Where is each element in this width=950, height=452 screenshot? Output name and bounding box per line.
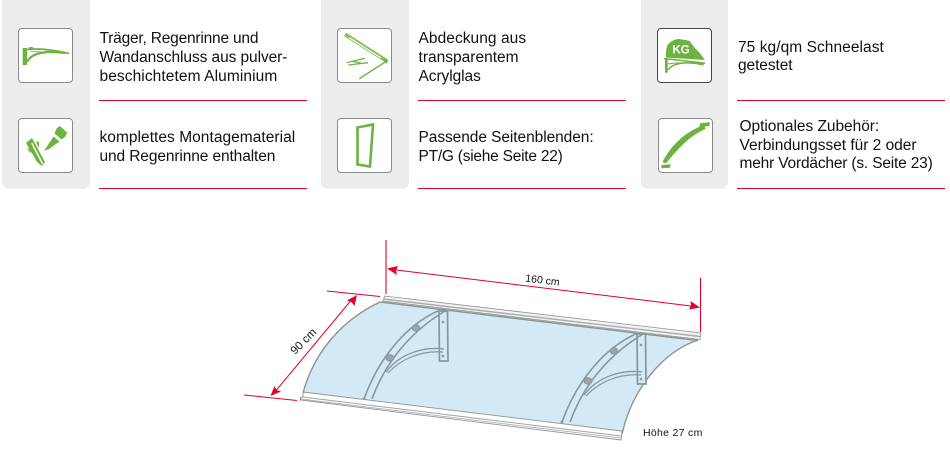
divider rule	[99, 188, 307, 189]
icon: screw and wall plug	[18, 118, 73, 173]
bottom rail	[300, 392, 622, 440]
panel: left icon column	[2, 0, 90, 189]
dimension: 160 cm	[386, 240, 700, 332]
divider rule	[737, 100, 945, 101]
glass side edges	[303, 302, 698, 434]
icon: snow load KG	[657, 28, 712, 83]
text: aluminium: beschichtetem Aluminium	[100, 68, 277, 84]
text: side panels: Passende Seitenblenden:	[418, 129, 594, 146]
panel: right icon column	[641, 0, 728, 189]
text: snow load	[738, 39, 884, 74]
divider rule	[737, 188, 945, 189]
text: optional accessories: Verbindungsset für 2 oder	[740, 136, 917, 154]
text: acrylic glass: Acrylglas	[418, 68, 481, 84]
divider rule	[418, 100, 626, 101]
text: optional accessories: Optionales Zubehör:	[740, 118, 879, 135]
text: mounting material: und Regenrinne enthalten	[100, 148, 275, 164]
right bracket	[561, 333, 646, 423]
dimension: 160 cm: 160 cm	[525, 273, 561, 289]
text: aluminium: Träger, Regenrinne und	[100, 30, 258, 46]
panel: middle icon column	[321, 0, 409, 189]
label: height: Höhe 27 cm	[643, 427, 703, 439]
icon: connecting set	[658, 118, 713, 173]
text: side panels	[418, 129, 594, 164]
text: side panels: PT/G (siehe Seite 22)	[418, 148, 562, 164]
icon: side panel	[337, 118, 392, 173]
text: snow load: getestet	[738, 57, 793, 74]
text: mounting material: komplettes Montagematerial	[100, 129, 295, 146]
text: optional accessories	[740, 118, 933, 172]
dimension: 90 cm: 90 cm	[289, 326, 319, 357]
text: acrylic glass: Abdeckung aus	[418, 30, 526, 46]
text: optional accessories: mehr Vordächer (s. Seite 23)	[740, 155, 933, 172]
divider rule	[99, 100, 307, 101]
left bracket	[363, 310, 448, 400]
canopy glass	[303, 302, 698, 434]
top rail	[380, 296, 701, 340]
text: acrylic glass	[418, 30, 526, 84]
divider rule	[418, 188, 626, 189]
text: aluminium	[100, 30, 287, 84]
icon: snow load KG: KG	[672, 44, 690, 56]
text: aluminium: Wandanschluss aus pulver-	[100, 48, 287, 66]
dimension: 90 cm	[244, 291, 380, 400]
icon: acrylic glass	[337, 28, 392, 83]
text: snow load: 75 kg/qm Schneelast	[738, 39, 884, 56]
icon: aluminium bracket	[18, 28, 73, 83]
text: mounting material	[100, 129, 295, 164]
text: acrylic glass: transparentem	[418, 48, 519, 66]
